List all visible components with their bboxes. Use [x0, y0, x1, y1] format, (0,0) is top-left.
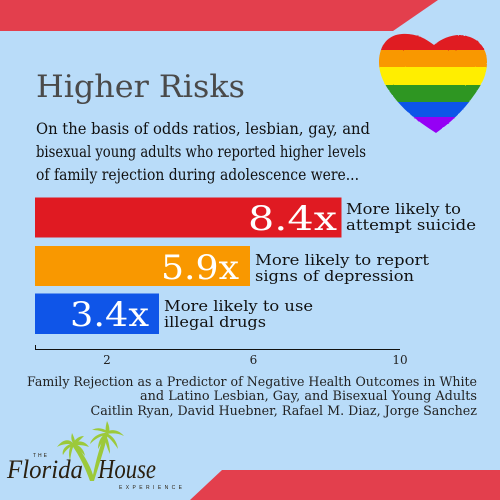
bar: drugs 3.4x — [35, 294, 313, 335]
bar: depression 5.9x: More likely to report — [255, 251, 429, 269]
x axis — [36, 345, 408, 367]
icon: rainbow heart — [379, 34, 487, 133]
source citation: Caitlin Ryan, David Huebner, Rafael M. Diaz, Jorge Sanchez — [90, 404, 477, 419]
bar: drugs 3.4x: 3.4x — [70, 295, 149, 335]
title: Higher Risks — [36, 69, 245, 105]
bar: suicide 8.4x: More likely to — [346, 200, 461, 218]
wordmark: EXPERIENCE — [119, 485, 183, 491]
source citation — [27, 375, 477, 419]
intro text: bisexual young adults who reported higher levels — [36, 142, 366, 161]
source citation: and Latino Lesbian, Gay, and Bisexual Young Adults — [140, 389, 477, 404]
icon: palm trees — [57, 421, 124, 481]
intro text — [36, 119, 370, 184]
bar: suicide 8.4x — [35, 198, 476, 239]
logo: The Florida House Experience — [6, 421, 183, 491]
bar: depression 5.9x — [35, 246, 429, 288]
wordmark — [6, 453, 183, 491]
bar: depression 5.9x: signs of depression — [255, 267, 414, 285]
x axis: 10 — [392, 353, 408, 367]
bar: depression 5.9x: 5.9x — [161, 248, 239, 288]
wordmark: Florida — [6, 455, 83, 484]
bottom red banner — [190, 470, 500, 500]
top red banner — [0, 0, 438, 31]
intro text: On the basis of odds ratios, lesbian, gay, and — [36, 119, 370, 138]
x axis: 6 — [250, 353, 257, 367]
bar chart — [35, 198, 476, 367]
bar: suicide 8.4x: 8.4x — [248, 199, 337, 239]
wordmark: THE — [33, 453, 49, 459]
bar: drugs 3.4x: illegal drugs — [164, 313, 266, 331]
bar: drugs 3.4x: More likely to use — [164, 297, 313, 315]
source citation: Family Rejection as a Predictor of Negative Health Outcomes in White — [27, 375, 477, 390]
intro text: of family rejection during adolescence were... — [36, 165, 359, 184]
x axis: 2 — [103, 353, 111, 367]
wordmark: House — [97, 454, 156, 484]
bar: suicide 8.4x: attempt suicide — [346, 216, 476, 234]
